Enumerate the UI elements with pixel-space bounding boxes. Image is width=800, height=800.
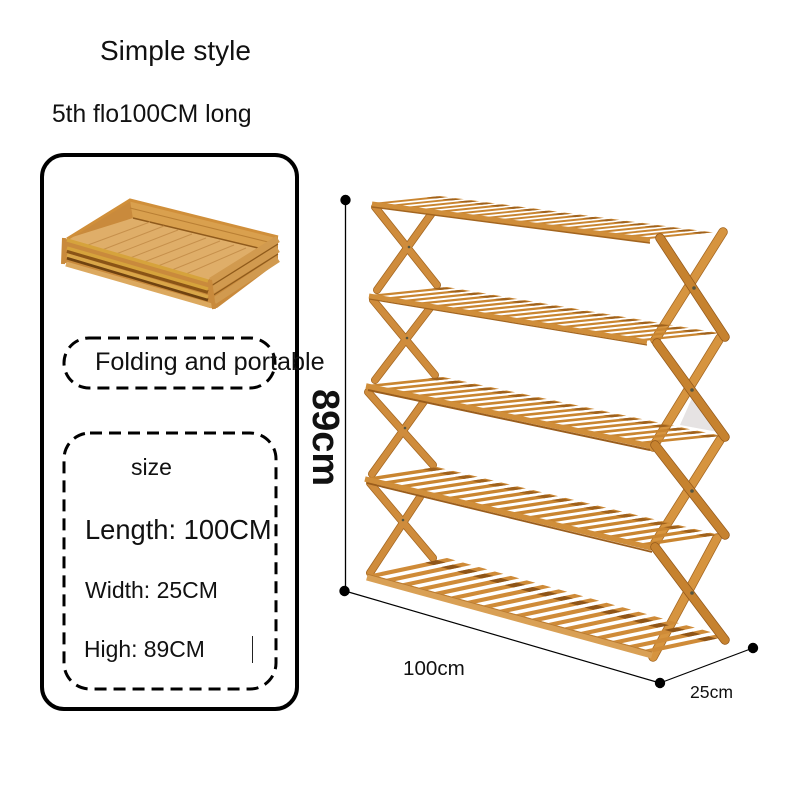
depth label: 25cm bbox=[690, 682, 733, 702]
size heading: size bbox=[131, 454, 172, 480]
height label: 89cm bbox=[304, 389, 346, 486]
depth dimension bbox=[660, 643, 758, 702]
shelf 5 bbox=[367, 561, 716, 655]
height: High: 89CM bbox=[84, 636, 205, 662]
shelf 4 bbox=[365, 468, 715, 552]
shelf 3 bbox=[366, 378, 718, 450]
callout: folding and portable: Folding and portable bbox=[95, 348, 325, 376]
width: Width: 25CM bbox=[85, 577, 218, 603]
subtitle: 5th flo100CM long bbox=[52, 101, 252, 128]
length: Length: 100CM bbox=[85, 514, 272, 545]
icon: folded shelf bbox=[62, 200, 278, 309]
title: Simple style bbox=[100, 35, 251, 66]
shelf 1 bbox=[372, 197, 710, 243]
shelf 2 bbox=[369, 288, 716, 345]
back right legs bbox=[653, 232, 723, 657]
left X legs bbox=[368, 207, 437, 573]
shoe rack illustration bbox=[365, 197, 725, 657]
height dimension bbox=[304, 195, 351, 596]
callout: folding and portable bbox=[64, 338, 325, 388]
length label: 100cm bbox=[403, 657, 465, 680]
panel: features bbox=[42, 155, 325, 709]
front right legs bbox=[655, 238, 725, 640]
pivot bolts bbox=[402, 246, 696, 595]
callout: size list bbox=[64, 433, 276, 689]
length dimension bbox=[345, 591, 665, 688]
